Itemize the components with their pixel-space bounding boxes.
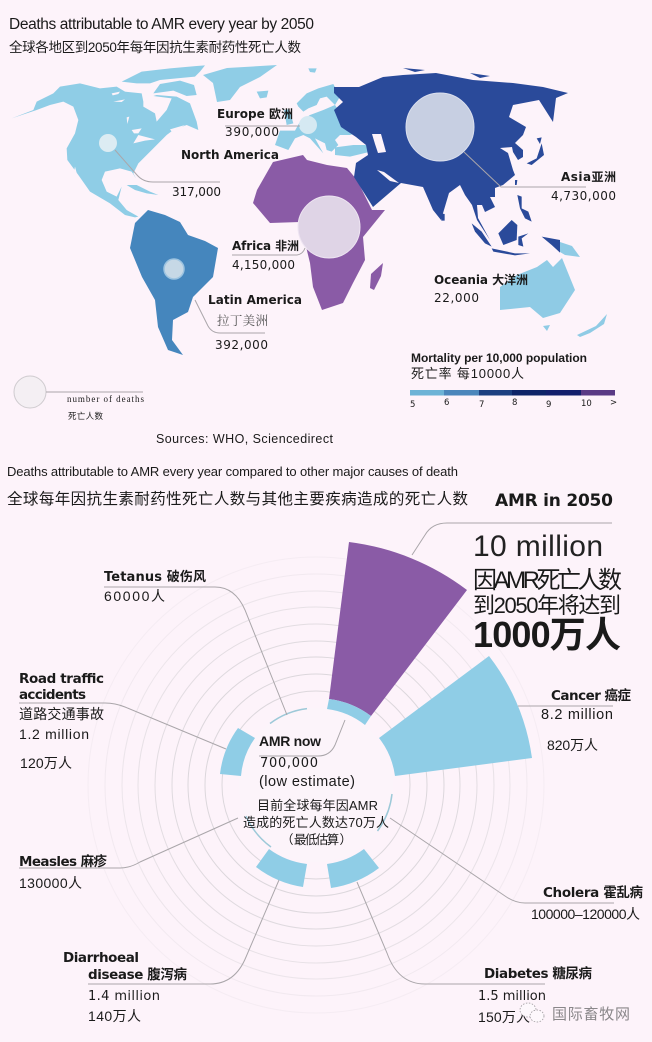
callout: Diarrhoeal disease [63,880,279,1024]
callout: Cancer: 8.2 million [541,707,613,723]
legend: mortality scale [410,351,617,410]
wedge: Cholera [378,794,392,831]
watermark: 国际畜牧网 [552,1006,630,1023]
label: Oceania: 22,000 [434,291,479,305]
wedge: Diarrhoeal disease [256,849,307,887]
map title: Deaths attributable to AMR every year by 2050 [9,16,314,33]
label: Europe: Europe 欧洲 [217,106,293,121]
label: Asia: Asia亚洲 [561,170,616,184]
heading: AMR in 2050: AMR in 2050 [495,491,613,511]
wedge: Tetanus [270,709,307,724]
callout: Diabetes: 1.5 million [478,989,546,1004]
wedge: AMR now [327,699,371,725]
legend: mortality scale: 8 [512,398,517,408]
callout: AMR now: (low estimate) [259,774,355,790]
callout: Diarrhoeal disease: disease 腹泻病 [88,966,188,983]
callout: AMR now: 700,000 [260,756,318,771]
callout: AMR now: （ 最低估算 ） [281,832,352,847]
callout: Cancer: 820万人 [547,737,598,753]
callout: AMR now [243,720,389,847]
label: Latin America [195,293,302,352]
callout: AMR in 2050: 因AMR死亡人数 [473,567,622,594]
callout: AMR now: 造成的死亡人数达70万人 [243,815,389,830]
wedge: Cancer [379,656,532,776]
label: Latin America: Latin America [208,293,302,307]
callout: Road traffic accidents: 道路交通事故 [19,706,104,722]
callout: Diarrhoeal disease: 140万人 [88,1008,141,1024]
wedge: Road traffic [220,728,255,776]
bubble: Africa [298,196,360,258]
radial chart [88,542,544,1013]
callout: Measles: Measles 麻疹 [19,853,108,870]
label: North America [115,148,279,199]
label: North America: North America [181,148,279,162]
label: Africa: 4,150,000 [232,258,295,272]
label: Europe: 390,000 [225,125,279,139]
chart rings [88,557,544,1013]
callout: Tetanus [104,569,287,715]
callout: AMR in 2050: 1000万人 [473,614,621,655]
label: Latin America: 拉丁美洲 [217,311,268,329]
map title: 全球各地区到2050年每年因抗生素耐药性死亡人数 [9,39,302,55]
callout: Tetanus: Tetanus 破伤风 [104,569,206,585]
section heading: 全球每年因抗生素耐药性死亡人数与其他主要疾病造成的死亡人数 [7,490,468,508]
wedge: Diabetes [327,849,379,888]
callout: Measles: 130000人 [19,875,82,891]
icon: chat bubbles [520,1003,544,1022]
callout: Road traffic accidents [19,671,226,771]
legend: bubble size: 死亡人数 [68,411,103,421]
world map [12,65,607,355]
callout: Road traffic accidents: Road traffic [19,671,104,687]
bubble: Latin America [164,259,184,279]
callout: Diarrhoeal disease: Diarrhoeal [63,950,139,966]
callout: Road traffic accidents: accidents [19,687,86,703]
legend: mortality scale: > [610,398,617,408]
legend: mortality scale: 5 [410,400,415,410]
bubble: Asia [406,93,474,161]
label: Asia [464,152,616,203]
callout: Diabetes: 150万人 [478,1009,530,1025]
label: Africa: Africa 非洲 [232,238,299,253]
section heading [7,464,468,508]
label: Oceania [434,272,528,305]
callout: Cancer: Cancer 癌症 [551,687,632,704]
callout: Diarrhoeal disease: 1.4 million [88,989,160,1004]
legend: mortality scale: 9 [546,400,551,410]
callout: Road traffic accidents: 1.2 million [19,726,89,742]
callout: Measles [19,818,238,891]
watermark [520,1003,630,1023]
callout: Diabetes: Diabetes 糖尿病 [484,965,592,982]
region: Asia [334,68,568,255]
callout: Cancer [518,687,632,753]
region: Africa [253,155,385,310]
wedge: Measles [246,816,271,847]
label: Europe [217,106,300,139]
callout: Tetanus: 60000人 [104,588,165,604]
inner disc [239,708,393,862]
callout: Road traffic accidents: 120万人 [20,755,72,771]
callout: AMR in 2050 [412,523,622,655]
label: Oceania: Oceania 大洋洲 [434,272,528,287]
region: North America [12,65,277,217]
legend: mortality scale: Mortality per 10,000 population [411,351,587,365]
callout: AMR now: 目前全球每年因AMR [257,798,378,813]
callout: AMR now: AMR now [259,733,321,749]
bubble: Europe [299,116,317,134]
region: inland seas [372,134,399,183]
section heading: Deaths attributable to AMR every year compared to other major causes of death [7,464,458,479]
callout: AMR in 2050: 到2050年将达到 [473,593,621,618]
legend: mortality scale: 10 [581,399,592,409]
bubble: North America [99,134,117,152]
callout: Cholera: 100000–120000人 [531,906,640,922]
wedge: AMR in 2050 [329,542,467,716]
label: Africa [232,238,305,272]
region: Latin America [130,210,218,355]
sources: Sources: WHO, Sciencedirect [156,432,334,446]
map title [9,16,314,55]
legend: bubble size: number of deaths [67,394,144,404]
callout: AMR in 2050: 10 million [473,530,603,563]
legend: mortality scale: 死亡率 每10000人 [411,366,524,381]
callout: Diabetes [357,882,592,1025]
callout: Cholera: Cholera 霍乱病 [543,884,644,901]
region: Europe [257,68,371,157]
label: Asia: 4,730,000 [551,189,616,203]
lakes and channels of North America [74,92,185,183]
callout: Cholera [390,818,644,922]
region: Papua and Oceania [500,242,607,337]
legend: bubble size [14,376,144,421]
label: Latin America: 392,000 [215,338,268,352]
label: North America: 317,000 [172,185,221,199]
legend: mortality scale: 6 [444,398,449,408]
legend: mortality scale: 7 [479,400,484,410]
